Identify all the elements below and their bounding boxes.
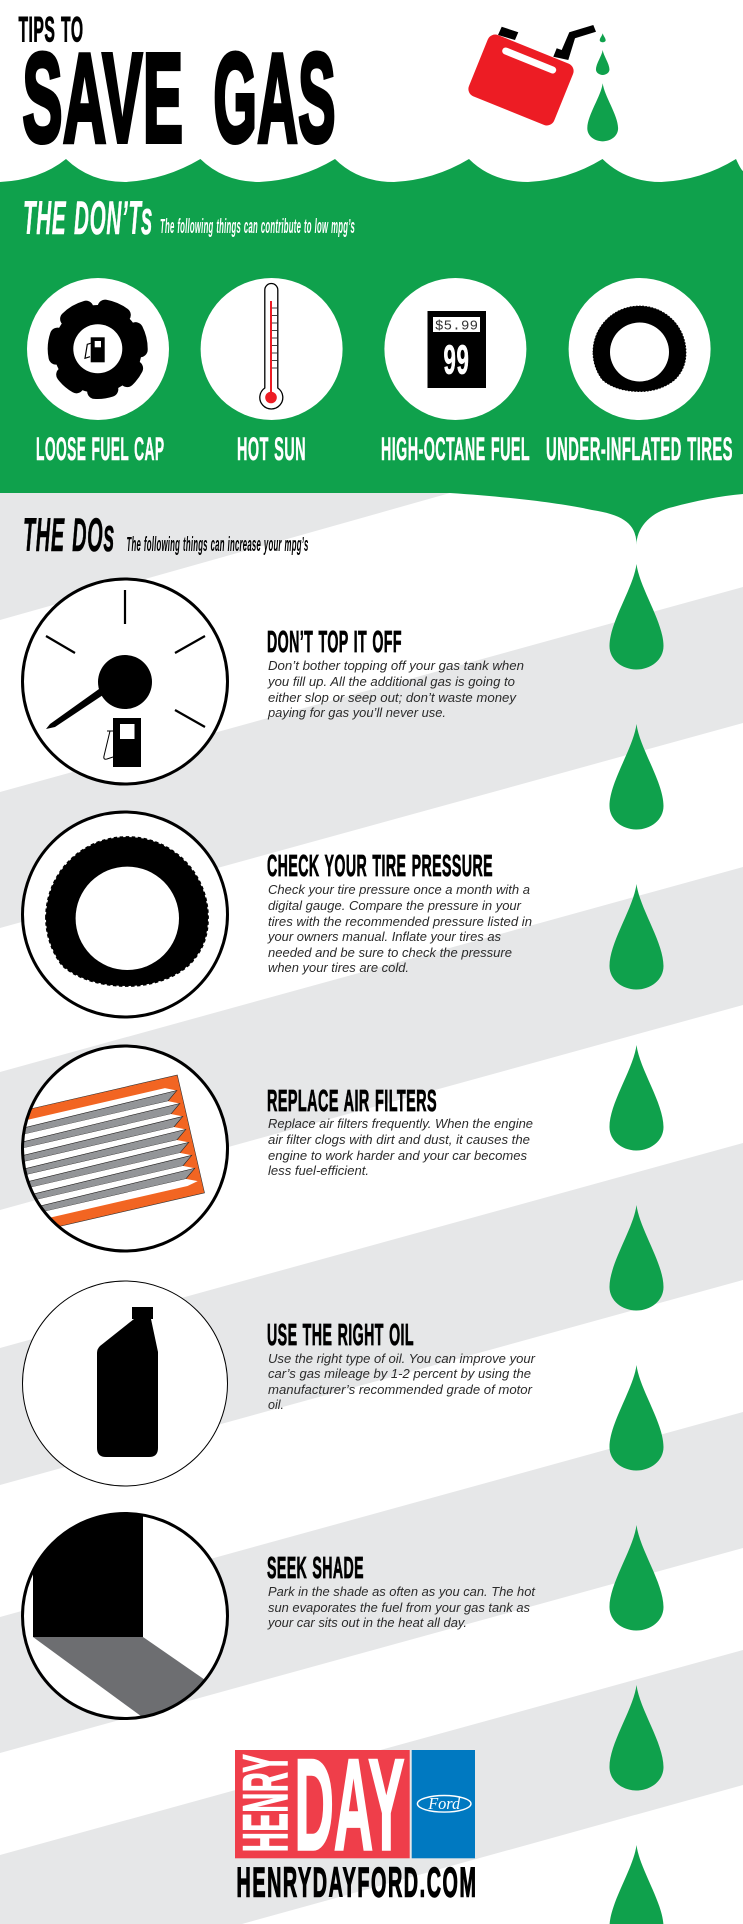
tip: seek shade bbox=[267, 1550, 536, 1630]
tip: check your tire pressure bbox=[267, 848, 532, 975]
icon: under-inflated tire bbox=[569, 278, 711, 420]
tip: check your tire pressure: when your tires are cold. bbox=[268, 960, 409, 975]
heading: the dos: THE DOs bbox=[23, 508, 115, 561]
logo: henry day ford: DAY bbox=[294, 1732, 404, 1878]
tip: seek shade: sun evaporates the fuel from your gas tank as bbox=[268, 1600, 530, 1615]
tip: replace air filters: air filter clogs with dirt and dust, it causes the bbox=[268, 1132, 530, 1147]
text: GAS bbox=[214, 28, 336, 168]
panel: the don'ts green section bbox=[0, 159, 743, 545]
tip: seek shade: SEEK SHADE bbox=[267, 1550, 364, 1585]
tip: replace air filters: less fuel-efficient. bbox=[268, 1163, 369, 1178]
icon: tire bbox=[22, 812, 228, 1017]
icon: loose fuel cap bbox=[27, 278, 169, 420]
icon: price pump: $5.99 bbox=[435, 318, 478, 334]
heading: the don'ts: THE DON’Ts bbox=[23, 191, 153, 244]
tip: check your tire pressure: tires with the recommended pressure listed in bbox=[268, 914, 532, 929]
tip: use the right oil: oil. bbox=[268, 1397, 284, 1412]
icon: thermometer bbox=[201, 278, 343, 420]
tip: seek shade: your car sits out in the heat all day. bbox=[267, 1615, 467, 1630]
tip: don't top it off: paying for gas you’ll never use. bbox=[267, 705, 446, 720]
icon: fuel gauge bbox=[22, 579, 228, 784]
logo: henry day ford: Ford bbox=[427, 1794, 461, 1813]
tip: don't top it off: DON’T TOP IT OFF bbox=[267, 624, 402, 659]
icon: air filter bbox=[0, 1046, 227, 1251]
tip: don't top it off: you fill up. All the additional gas is going to bbox=[267, 674, 515, 689]
tip: check your tire pressure: needed and be sure to check the pressure bbox=[268, 945, 512, 960]
tip: seek shade: Park in the shade as often as you can. The hot bbox=[268, 1584, 536, 1599]
labels: the don'ts: LOOSE FUEL CAP bbox=[36, 431, 164, 467]
tip: use the right oil bbox=[267, 1317, 536, 1412]
tip: replace air filters: Replace air filters frequently. When the engine bbox=[268, 1116, 533, 1131]
tip: don't top it off: either slop or seep out; don’t waste money bbox=[268, 690, 518, 705]
labels: the don'ts: HIGH-OCTANE FUEL bbox=[381, 431, 530, 467]
text: HENRYDAYFORD.COM bbox=[236, 1858, 478, 1906]
title: TIPS TO bbox=[18, 10, 84, 50]
tip: use the right oil: manufacturer’s recommended grade of motor bbox=[268, 1382, 533, 1397]
tip: use the right oil: Use the right type of oil. You can improve your bbox=[268, 1351, 536, 1366]
tip: don't top it off: Don’t bother topping off your gas tank when bbox=[268, 658, 524, 673]
tip: replace air filters: REPLACE AIR FILTERS bbox=[267, 1083, 437, 1118]
background stripes bbox=[0, 493, 743, 1924]
logo: henry day ford bbox=[231, 1732, 475, 1878]
icon: shade building bbox=[21, 1512, 229, 1720]
drops column bbox=[610, 564, 664, 1924]
tip: don't top it off bbox=[267, 624, 524, 720]
title: SAVE bbox=[22, 28, 184, 168]
labels: the don'ts: HOT SUN bbox=[237, 431, 306, 467]
labels: the don'ts bbox=[36, 431, 733, 467]
tip: check your tire pressure: digital gauge. Compare the pressure in your bbox=[268, 898, 522, 913]
tip: check your tire pressure: Check your tire pressure once a month with a bbox=[268, 882, 530, 897]
icon: oil bottle bbox=[22, 1281, 228, 1486]
tip: check your tire pressure: your owners manual. Inflate your tires as bbox=[267, 929, 501, 944]
tip: replace air filters bbox=[267, 1083, 533, 1178]
tip: replace air filters: engine to work harder and your car becomes bbox=[268, 1148, 527, 1163]
icon: price pump bbox=[384, 278, 526, 420]
tip: use the right oil: car’s gas mileage by 1-2 percent by using the bbox=[268, 1366, 531, 1381]
text: The following things can increase your mpg’s bbox=[126, 534, 308, 556]
icon: price pump: 99 bbox=[444, 336, 470, 382]
icon: red gas can pouring drops bbox=[466, 25, 618, 141]
panel: the don'ts green section: The following things can contribute to low mpg’s bbox=[160, 216, 355, 238]
logo: henry day ford: HENRY bbox=[231, 1754, 301, 1852]
tip: use the right oil: USE THE RIGHT OIL bbox=[267, 1317, 414, 1352]
